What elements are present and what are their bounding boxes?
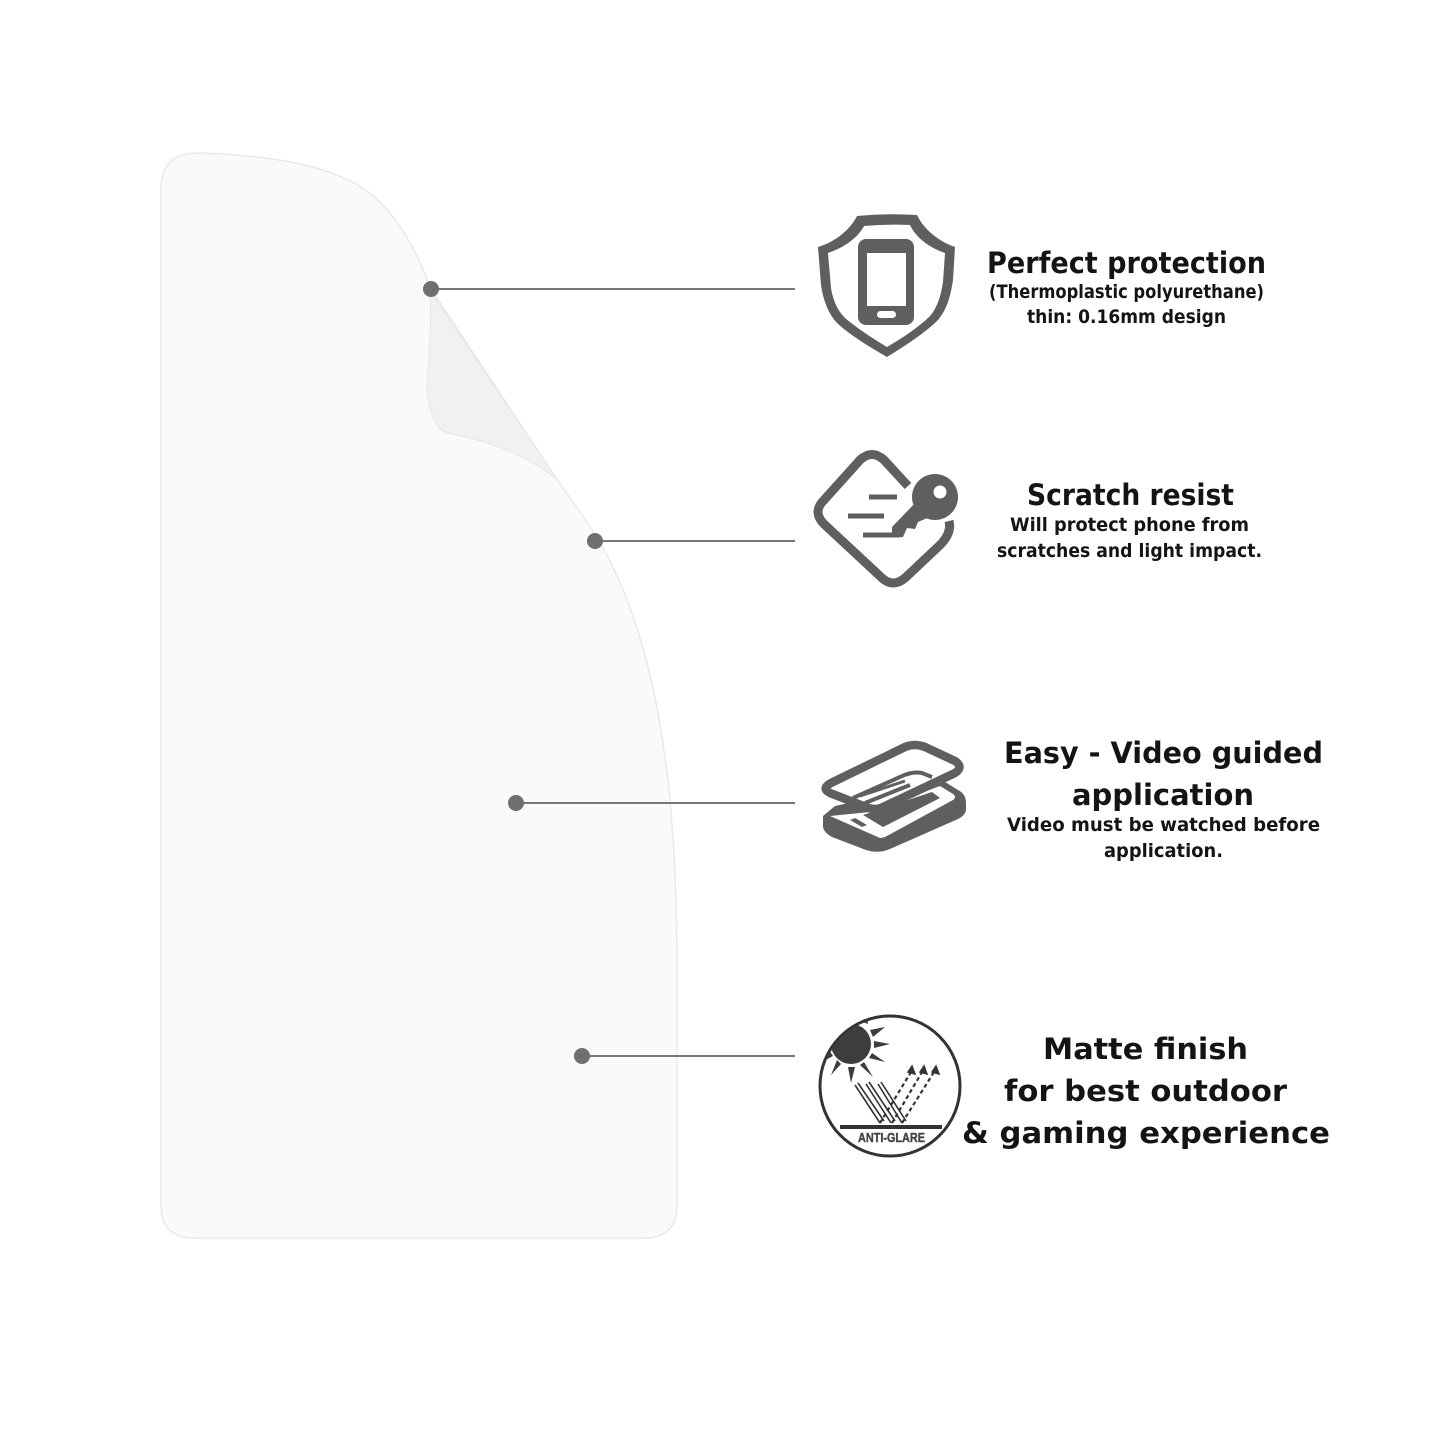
text: easy video guided application [1004, 736, 1323, 862]
text: matte finish: & gaming experience [962, 1116, 1330, 1150]
icon: layered film over phone [823, 745, 966, 852]
icon: anti-glare sun badge [820, 1016, 960, 1156]
text: scratch resist: Scratch resist [1027, 478, 1234, 512]
infographic canvas [160, 152, 1328, 1239]
text: scratch resist: Will protect phone from [1010, 514, 1249, 536]
text: perfect protection: thin: 0.16mm design [1027, 306, 1226, 328]
callout connector 1 [423, 281, 795, 297]
text: scratch resist [997, 478, 1262, 562]
anti-glare label: ANTI-GLARE [858, 1130, 925, 1145]
peeled fold [427, 292, 557, 479]
text: matte finish [962, 1032, 1330, 1150]
callout connector 3 [508, 795, 795, 811]
text: perfect protection: Perfect protection [987, 246, 1266, 280]
text: easy video guided application: application [1072, 778, 1254, 812]
text: easy video guided application: Easy - Video guided [1004, 736, 1323, 770]
icon: shield with phone [818, 214, 955, 357]
text: easy video guided application: application. [1104, 840, 1223, 862]
screen protector sheet with peeled corner [161, 153, 677, 1238]
text: matte finish: for best outdoor [1004, 1074, 1288, 1108]
text: matte finish: Matte finish [1043, 1032, 1248, 1066]
text: perfect protection: (Thermoplastic polyurethane) [989, 281, 1264, 303]
text: perfect protection [987, 246, 1266, 328]
text: scratch resist: scratches and light impact. [997, 540, 1262, 562]
icon: key scratching a screen [818, 454, 958, 583]
callout connector 4 [574, 1048, 795, 1064]
callout connector 2 [587, 533, 795, 549]
text: easy video guided application: Video must be watched before [1007, 814, 1320, 836]
sheet body [161, 153, 677, 1238]
